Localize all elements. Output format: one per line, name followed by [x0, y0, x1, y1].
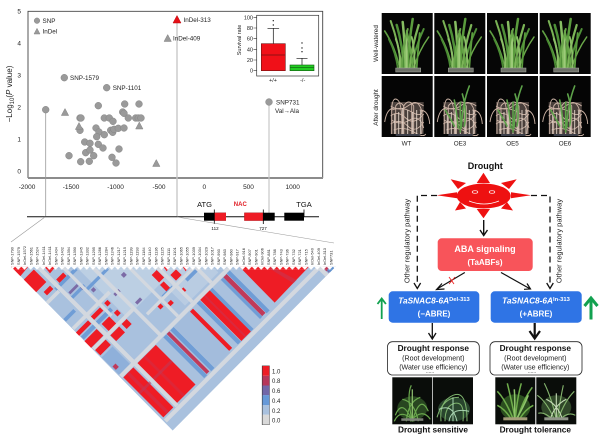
point labels: SNP-1101 — [113, 85, 142, 92]
SNP name labels: SNP-1579 — [16, 247, 21, 265]
SNP name labels: SNP-715 — [303, 249, 308, 265]
gene structure diagram: TGA — [296, 200, 312, 209]
SNP name labels: InDel-906 — [260, 248, 264, 265]
SNP name labels: SNP-732 — [291, 249, 296, 265]
decorative tone blocks are unlabelled; rect x = first SNP, y = second SNP — [77, 266, 162, 315]
icon: sun — [437, 173, 531, 218]
heatmap colour scale: 0.2 — [272, 409, 281, 415]
SNP name labels: SNP-881 — [266, 249, 271, 265]
SNP name labels: SNP-788 — [272, 249, 277, 265]
row labels: Well-watered — [373, 25, 380, 62]
inset: survival rate boxplot: 60 — [247, 37, 253, 43]
SNP name labels: SNP-1790 — [10, 246, 14, 265]
gene structure diagram: NAC — [234, 202, 247, 208]
heatmap colour scale: 1.0 — [272, 370, 281, 376]
box: drought response left: (Water use efficiency) — [399, 364, 467, 372]
SNP name labels: SNP-1345 — [78, 247, 83, 265]
panel: association scatter plot — [5, 8, 323, 216]
caption: drought tolerance: Drought tolerance — [500, 424, 571, 434]
x axis bar — [28, 177, 323, 179]
SNP name labels: SNP-1295 — [91, 247, 96, 265]
x axis labels: 500 — [243, 184, 254, 191]
LD heatmap — [11, 266, 336, 430]
photos: drought tolerance — [495, 377, 576, 424]
plot frame — [28, 11, 323, 178]
arrow: ABA to In-313 — [501, 272, 530, 289]
panel: plant phenotype photos — [373, 13, 591, 148]
box: drought response right: (Water use efficiency) — [501, 364, 569, 372]
box: drought response left — [388, 342, 479, 375]
box: TaSNAC8-6A Del-313: (−ABRE) — [418, 310, 451, 318]
gene structure diagram: ATG — [197, 200, 212, 209]
gene structure diagram: 727 — [259, 226, 267, 231]
inset: survival rate boxplot: -/- — [300, 78, 305, 84]
SNP name labels: InDel-409 — [316, 248, 321, 265]
box: drought response right: Drought response — [500, 343, 571, 353]
column labels: WT — [402, 140, 412, 148]
SNP name labels: SNP-1332 — [84, 247, 90, 265]
SNP name labels: SNP-1394 — [66, 246, 71, 265]
SNP name labels: SNP-960 — [228, 248, 233, 265]
point labels: SNP731 — [276, 100, 300, 106]
heatmap colour scale: 0.8 — [272, 379, 281, 385]
column labels: OE3 — [454, 140, 467, 148]
box: TaSNAC8-6A Del-313: Del-313 — [449, 297, 471, 303]
point labels: InDel-313 — [184, 17, 211, 24]
column labels — [402, 140, 572, 148]
SNP name labels: SNP-1039 — [191, 247, 196, 265]
column labels: OE5 — [506, 140, 519, 148]
y axis ticks: 2 — [17, 104, 21, 112]
SNP name labels: SNP-1111 — [166, 248, 171, 265]
arrow: drought to ABA — [480, 220, 488, 236]
SNP name labels: SNP-1140 — [147, 247, 152, 265]
SNP name labels: SNP-1217 — [116, 247, 121, 265]
legend: InDel — [42, 28, 57, 36]
pathway labels: Other regulatory pathway — [554, 199, 564, 283]
inset: survival rate boxplot: 20 — [247, 58, 253, 64]
SNP name labels: SNP-1034 — [197, 246, 202, 265]
panel: drought signaling model — [378, 161, 598, 434]
dashed pathways — [417, 196, 550, 285]
SNP name labels: SNP-1136 — [153, 247, 158, 265]
y axis ticks: 1 — [17, 136, 21, 144]
box: ABA signaling: ABA signaling — [454, 244, 516, 254]
SNP name labels — [10, 246, 333, 265]
inset: survival rate boxplot: 40 — [247, 47, 253, 53]
inset: survival rate boxplot: 100 — [244, 15, 253, 21]
point labels: Val→Ala — [275, 108, 300, 115]
y axis ticks: 3 — [17, 72, 21, 80]
x axis labels: -2000 — [19, 184, 36, 191]
SNP name labels: SNP-721 — [297, 249, 302, 265]
x axis labels: 1000 — [285, 184, 300, 191]
box: TaSNAC8-6A Del-313 — [389, 291, 479, 323]
SNP name labels: InDel-1411 — [47, 246, 52, 265]
SNP name labels: SNP-983 — [222, 249, 227, 265]
icon: large green up arrow — [584, 298, 598, 320]
y axis label: P value) — [5, 66, 14, 95]
box: TaSNAC8-6A Del-313: TaSNAC8-6A — [398, 296, 449, 306]
x axis labels: -1500 — [63, 184, 80, 191]
inset: survival rate boxplot: 80 — [247, 26, 253, 32]
SNP points — [42, 74, 272, 166]
column labels: OE6 — [559, 140, 572, 148]
box: TaSNAC8-6A In-313: (+ABRE) — [520, 310, 553, 318]
y axis label: 10 — [10, 97, 16, 104]
box: drought response left: ...... — [426, 369, 434, 375]
box: TaSNAC8-6A In-313: TaSNAC8-6A — [502, 296, 553, 306]
y axis ticks — [17, 8, 21, 176]
box: drought response left: (Root development) — [402, 354, 464, 362]
after-drought photos — [382, 76, 591, 137]
SNP name labels: SNP-1029 — [203, 247, 208, 265]
heatmap colour scale: 0.0 — [272, 418, 281, 424]
x axis labels: -500 — [152, 184, 166, 191]
SNP name labels: SNP-1017 — [210, 247, 214, 265]
InDel points — [61, 34, 171, 166]
arrow: In-313 to response — [530, 323, 540, 338]
SNP name labels: SNP-1404 — [53, 246, 58, 265]
SNP name labels: SNP-1286 — [97, 247, 102, 265]
SNP name labels: SNP-907 — [247, 249, 252, 265]
SNP name labels: SNP731 — [328, 250, 333, 265]
inset: survival rate boxplot: +/+ — [269, 78, 277, 84]
SNP name labels: SNP-1284 — [103, 246, 108, 265]
dashed arrow heads — [414, 283, 553, 288]
well-watered photos — [382, 13, 591, 74]
heatmap colour scale — [262, 366, 281, 424]
guide lines from variants to gene — [46, 20, 269, 216]
SNP name labels: SNP-1055 — [184, 247, 190, 265]
x axis labels — [19, 184, 300, 191]
SNP name labels: SNP-1524 — [34, 246, 40, 265]
SNP name labels: SNP-1402 — [60, 247, 64, 265]
SNP name labels: SNP-736 — [284, 249, 290, 265]
box: TaSNAC8-6A In-313 — [491, 291, 582, 323]
SNP name labels: SNP-1215 — [122, 247, 127, 265]
solid red corner blocks at the top of the triangle — [11, 267, 28, 277]
box: drought response right: ...... — [528, 369, 536, 375]
SNP name labels: SNP-1390 — [72, 246, 77, 265]
icon: small green up arrow — [378, 298, 386, 319]
y axis ticks: 4 — [17, 40, 21, 48]
gene structure diagram: 112 — [211, 226, 219, 231]
SNP name labels: SNP-1561 — [28, 247, 33, 265]
row labels: After drought — [373, 89, 380, 126]
SNP name labels: SNP-1184 — [141, 247, 146, 265]
legend — [34, 18, 57, 36]
row labels — [373, 25, 380, 126]
box: TaSNAC8-6A In-313: In-313 — [553, 297, 571, 303]
highlighted InDel-313 — [173, 16, 181, 23]
arrow: blocked to Del-313 — [436, 272, 465, 290]
x axis labels: -1000 — [107, 184, 124, 191]
SNP name labels: InDel-1572 — [22, 246, 27, 265]
point labels: SNP-1579 — [70, 75, 100, 82]
SNP name labels: InDel-540 — [310, 247, 314, 265]
x axis labels: 0 — [202, 184, 206, 191]
y axis ticks: 0 — [17, 168, 21, 176]
pathway labels: Other regulatory pathway — [402, 199, 412, 283]
y axis label: ( — [5, 95, 14, 98]
photos: drought sensitive — [392, 377, 473, 424]
icon: red cross — [449, 277, 455, 284]
legend: SNP — [42, 18, 55, 25]
arrow: Del-313 to response — [428, 323, 436, 339]
SNP name labels: InDel-916 — [241, 248, 246, 265]
point labels — [70, 17, 300, 115]
heading: Drought: Drought — [468, 161, 503, 171]
SNP name labels: SNP-1125 — [160, 247, 164, 265]
SNP name labels: SNP-1199 — [128, 247, 133, 265]
SNP name labels: SNP-1065 — [178, 247, 183, 265]
SNP name labels: SNP-1246 — [110, 247, 114, 265]
pathway labels — [402, 199, 564, 283]
inset: survival rate boxplot — [237, 15, 319, 84]
point labels: InDel-409 — [173, 36, 201, 42]
heatmap colour scale: 0.4 — [272, 399, 281, 405]
y axis ticks: 5 — [17, 8, 21, 16]
y axis label: −Log — [5, 104, 14, 122]
box: drought response right — [490, 342, 582, 375]
SNP name labels: SNP-917 — [234, 249, 240, 265]
inset: survival rate boxplot: Survival rate — [237, 25, 243, 55]
box: ABA signaling: (TaABFs) — [468, 258, 503, 267]
SNP name labels: InDel-313 — [322, 248, 327, 265]
SNP name labels: SNP-993 — [216, 249, 221, 265]
caption: drought sensitive: Drought sensitive — [398, 424, 468, 434]
SNP name labels: SNP-901 — [253, 249, 258, 265]
heatmap colour scale: 0.6 — [272, 389, 281, 395]
SNP name labels: SNP-1193 — [134, 247, 140, 265]
box: drought response left: Drought response — [398, 343, 469, 353]
box: ABA signaling — [438, 238, 533, 271]
SNP name labels: InDel-1411 — [41, 246, 46, 265]
inset: survival rate boxplot: 0 — [250, 69, 253, 75]
gene structure diagram — [11, 200, 334, 243]
SNP name labels: SNP-1101 — [172, 247, 177, 265]
box: drought response right: (Root development) — [504, 354, 566, 362]
SNP name labels: SNP-743 — [278, 249, 283, 265]
